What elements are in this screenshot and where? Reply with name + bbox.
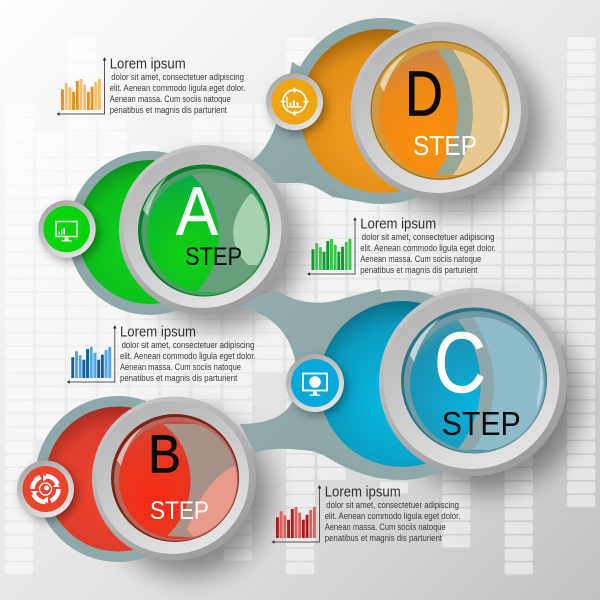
text block: top left with orange chart [56,56,245,116]
back circle: C [307,290,497,480]
step C [379,288,567,476]
body text [110,72,245,115]
back circle: B [35,396,201,562]
ring: A [119,145,289,315]
step B [92,396,256,560]
body text: Aenean massa. Cum sociis natoque [110,94,231,104]
text block: right with green chart [307,216,496,276]
body text [360,232,496,275]
body text: dolor sit amet, consectetuer adipiscing [326,500,459,510]
back circle: D [289,18,475,204]
letter: B: B [148,424,181,484]
body text: elit. Aenean commodo ligula eget dolor. [360,243,496,253]
body text: elit. Aenean commodo ligula eget dolor. [325,511,460,521]
icon badge: A monitor [38,200,96,258]
connector: A to C to B [230,289,420,480]
label: STEP B: STEP [150,497,209,525]
body text: penatibus et magnis dis parturient [110,105,227,115]
body text [325,500,460,543]
letter: A: A [176,173,218,250]
letter: C: C [434,315,486,411]
chart: orange bars [56,57,106,116]
body text [120,340,256,383]
letter: D: D [405,58,443,130]
heading: Lorem ipsum [120,324,196,340]
chart: red bars [272,485,321,544]
connector: D to A [245,62,380,204]
back circle: A [68,151,232,315]
icon badge: C monitor pie [286,354,344,412]
heading: Lorem ipsum [360,216,436,232]
label: STEP C: STEP [442,405,521,442]
body text: penatibus et magnis dis parturient [120,373,238,383]
heading: Lorem ipsum [110,56,186,72]
glass: B [111,414,242,542]
heading: Lorem ipsum [325,484,401,500]
small circle shadows [21,78,347,521]
step A [119,145,289,315]
label: STEP D: STEP [413,130,477,161]
chart: green bars [307,217,357,276]
glass: C [401,308,550,454]
ring: C [379,288,567,476]
glass: A [138,164,272,296]
body text: elit. Aenean commodo ligula eget dolor. [110,83,245,93]
icon badge: B cycle arrows [17,460,74,518]
ring: B [92,396,256,560]
drop shadows [106,38,581,576]
body text: Aenean massa. Cum sociis natoque [325,522,446,532]
text block: left with blue chart [67,324,256,384]
body text: penatibus et magnis dis parturient [360,265,478,275]
body text: penatibus et magnis dis parturient [325,533,442,543]
ring: D [350,22,528,200]
body text: Aenean massa. Cum sociis natoque [360,254,481,264]
icon badge: D chart target [266,73,323,130]
body text: Aenean massa. Cum sociis natoque [120,362,241,372]
step D [350,22,528,200]
label: STEP A: STEP [185,243,242,271]
body text: elit. Aenean commodo ligula eget dolor. [120,351,256,361]
text block: bottom with red chart [272,484,460,544]
body text: dolor sit amet, consectetuer adipiscing [122,340,254,350]
body text: dolor sit amet, consectetuer adipiscing [362,232,494,242]
chart: blue bars [67,325,117,384]
glass: D [370,41,520,180]
body text: dolor sit amet, consectetuer adipiscing [111,72,244,82]
